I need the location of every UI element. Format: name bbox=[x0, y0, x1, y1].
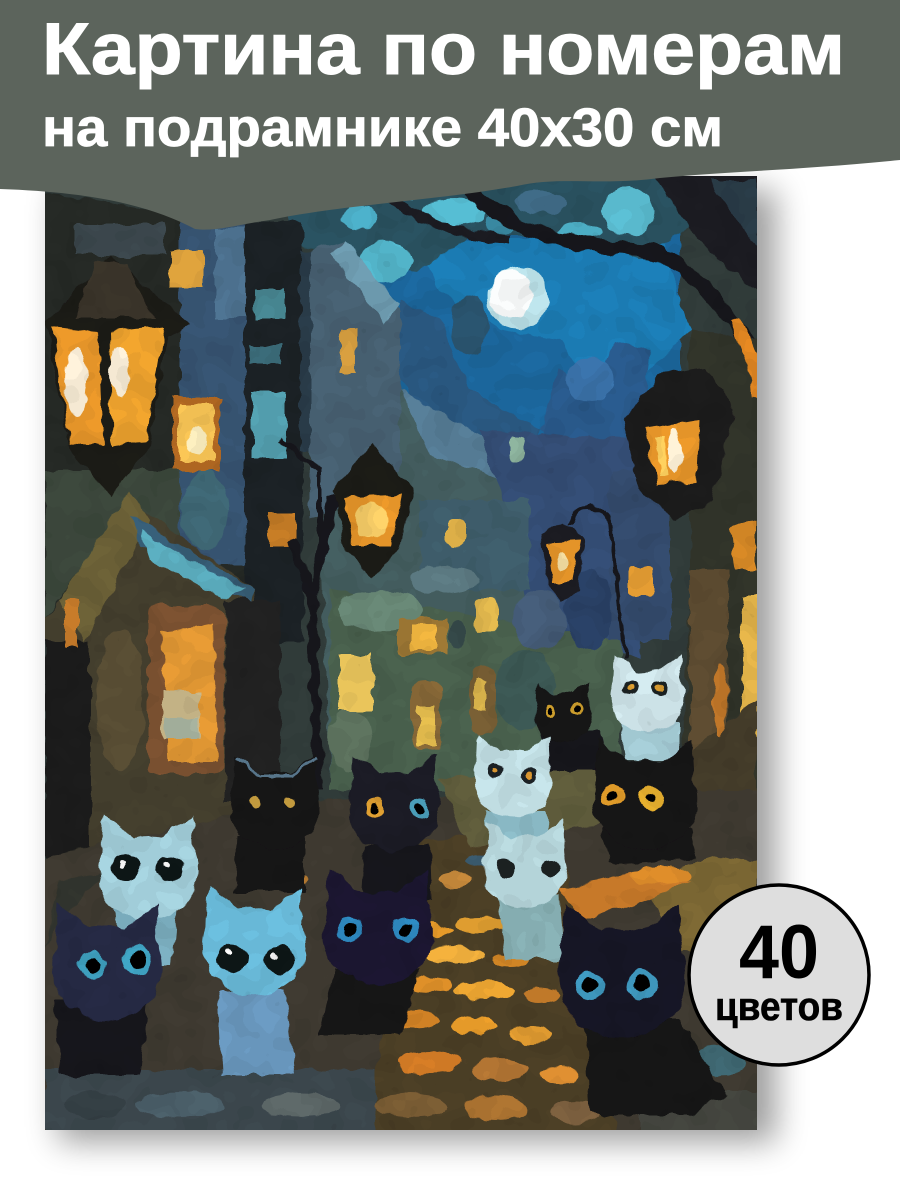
cat: blue left back bbox=[98, 816, 198, 965]
cat: white centre upper bbox=[474, 734, 552, 850]
ground and cobblestones bbox=[45, 770, 757, 1130]
building windows bbox=[339, 436, 524, 750]
cat: black back left bbox=[230, 755, 320, 892]
cat: navy far left bbox=[52, 904, 162, 1075]
cat: black right upper bbox=[593, 740, 697, 865]
left upper wall bbox=[45, 193, 248, 617]
subtitle: на подрамнике 40х30 см bbox=[42, 98, 723, 158]
title: Картина по номерам bbox=[42, 9, 845, 90]
cat: far white bbox=[610, 655, 684, 760]
badge: 40 colours: 40 bbox=[739, 910, 819, 995]
header banner bbox=[0, 0, 900, 230]
sky with moon bbox=[378, 232, 692, 440]
badge: 40 colours: цветов bbox=[715, 985, 843, 1029]
cat: far black bbox=[534, 682, 610, 770]
painting: night street with cats bbox=[30, 160, 770, 1150]
dark pillar bbox=[242, 220, 314, 644]
cat: black centre upper bbox=[349, 755, 439, 900]
canvas shadow bbox=[58, 190, 776, 1142]
cat: black large front right bbox=[558, 904, 725, 1115]
badge: 40 colours bbox=[689, 885, 869, 1065]
street lamp with pole bbox=[280, 440, 414, 790]
left house bbox=[45, 490, 280, 870]
right wall bbox=[610, 320, 770, 800]
moon bbox=[487, 267, 549, 329]
cat: white centre lower bbox=[483, 820, 567, 960]
right lantern bbox=[622, 368, 735, 520]
left lantern bbox=[48, 255, 190, 495]
cat: black centre front bbox=[318, 870, 433, 1035]
tree foliage and branches bbox=[288, 176, 757, 338]
middle building bbox=[310, 240, 650, 790]
cat: blue front bbox=[203, 887, 305, 1075]
small windows left bbox=[170, 250, 220, 471]
distant lamps bbox=[540, 508, 653, 660]
painterly colour patches bbox=[45, 176, 757, 1130]
